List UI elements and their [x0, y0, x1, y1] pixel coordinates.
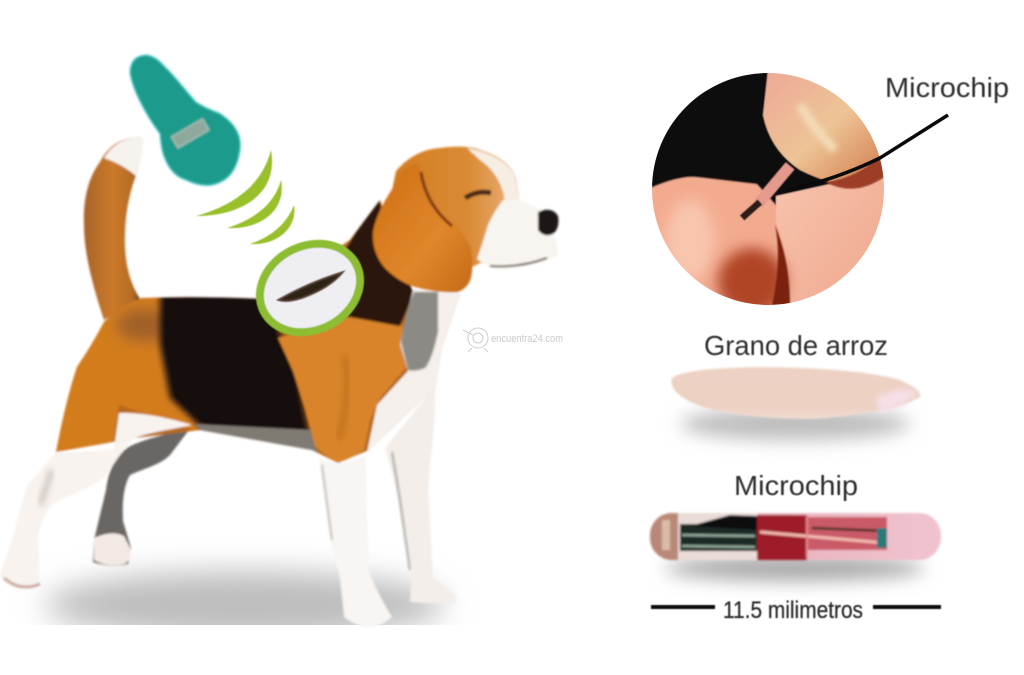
capsule: [650, 513, 941, 560]
head white blaze: [467, 148, 519, 206]
finger fold shadow: [718, 248, 786, 316]
nose: [538, 210, 558, 235]
scale line right: [873, 605, 941, 609]
chest orange: [278, 310, 408, 466]
tail: [84, 138, 142, 320]
white chest: [367, 290, 465, 452]
rice shadow: [680, 408, 910, 440]
label: Microchip: Microchip: [734, 470, 858, 501]
grey belly: [195, 424, 318, 455]
ear crease: [421, 172, 452, 226]
ring: [245, 227, 375, 349]
nail highlight: [800, 105, 835, 150]
near hind leg: [0, 413, 192, 589]
panel: microchip close-up photo: [650, 70, 1009, 316]
watermark: [463, 328, 563, 352]
rice grain: [671, 367, 920, 419]
wave 3: [250, 205, 294, 244]
near leg shade: [322, 465, 332, 540]
muzzle: [477, 200, 558, 269]
black saddle: [160, 292, 310, 436]
rump shading: [117, 309, 173, 341]
lower right finger: [775, 176, 884, 303]
chest fold shading: [338, 355, 347, 440]
panel: dog with scanner: [0, 55, 563, 639]
grey neck stripe: [401, 292, 438, 371]
microchip pointer line: [787, 115, 948, 190]
needle: [758, 166, 790, 204]
signal waves: [196, 150, 294, 244]
label: Microchip: Microchip: [885, 72, 1009, 103]
neck dark: [345, 196, 416, 326]
watermark text: encuentra24.com: [491, 333, 563, 345]
scale line left: [651, 605, 715, 609]
far front leg: [385, 386, 456, 603]
dark fold: [772, 225, 790, 305]
scale label: 11.5 milimetros: [723, 597, 863, 624]
panel: microchip capsule: [650, 470, 941, 624]
needle tip: [742, 202, 760, 218]
finger highlight: [666, 200, 714, 280]
label: Grano de arroz: Grano de arroz: [704, 330, 888, 361]
coil: [680, 524, 757, 551]
mouth: [490, 258, 547, 266]
eye: [465, 192, 491, 198]
ear: [373, 163, 472, 292]
ground shadow: [45, 571, 445, 639]
body colour patches: [50, 196, 465, 466]
wave 1: [196, 150, 272, 216]
implanted chip: [278, 272, 343, 301]
dog illustration: [0, 138, 558, 627]
rear body orange: [56, 297, 198, 452]
capacitor section: [757, 515, 807, 560]
scanner body: [130, 55, 240, 185]
chip callout ring: [245, 227, 375, 349]
far leg shadow: [392, 452, 410, 570]
photo disc: [650, 70, 890, 316]
far hind leg: [93, 426, 192, 566]
rice tip highlight: [875, 389, 918, 412]
capsule shadow: [665, 555, 925, 581]
thumb shadow: [824, 156, 884, 190]
body base: [56, 200, 460, 463]
hind paw toes: [4, 578, 40, 587]
wave 2: [227, 180, 282, 228]
thumb with nail: [762, 73, 880, 188]
scanner label: [171, 119, 209, 148]
scanner device: [130, 55, 240, 185]
rear leg shade: [40, 470, 52, 505]
near front leg: [319, 456, 392, 627]
watermark target icon: [463, 328, 488, 352]
tail tip: [104, 138, 143, 176]
lower left finger: [650, 177, 790, 310]
far hind paw: [94, 533, 131, 565]
panel: rice grain: [671, 330, 920, 440]
head orange: [390, 147, 519, 270]
